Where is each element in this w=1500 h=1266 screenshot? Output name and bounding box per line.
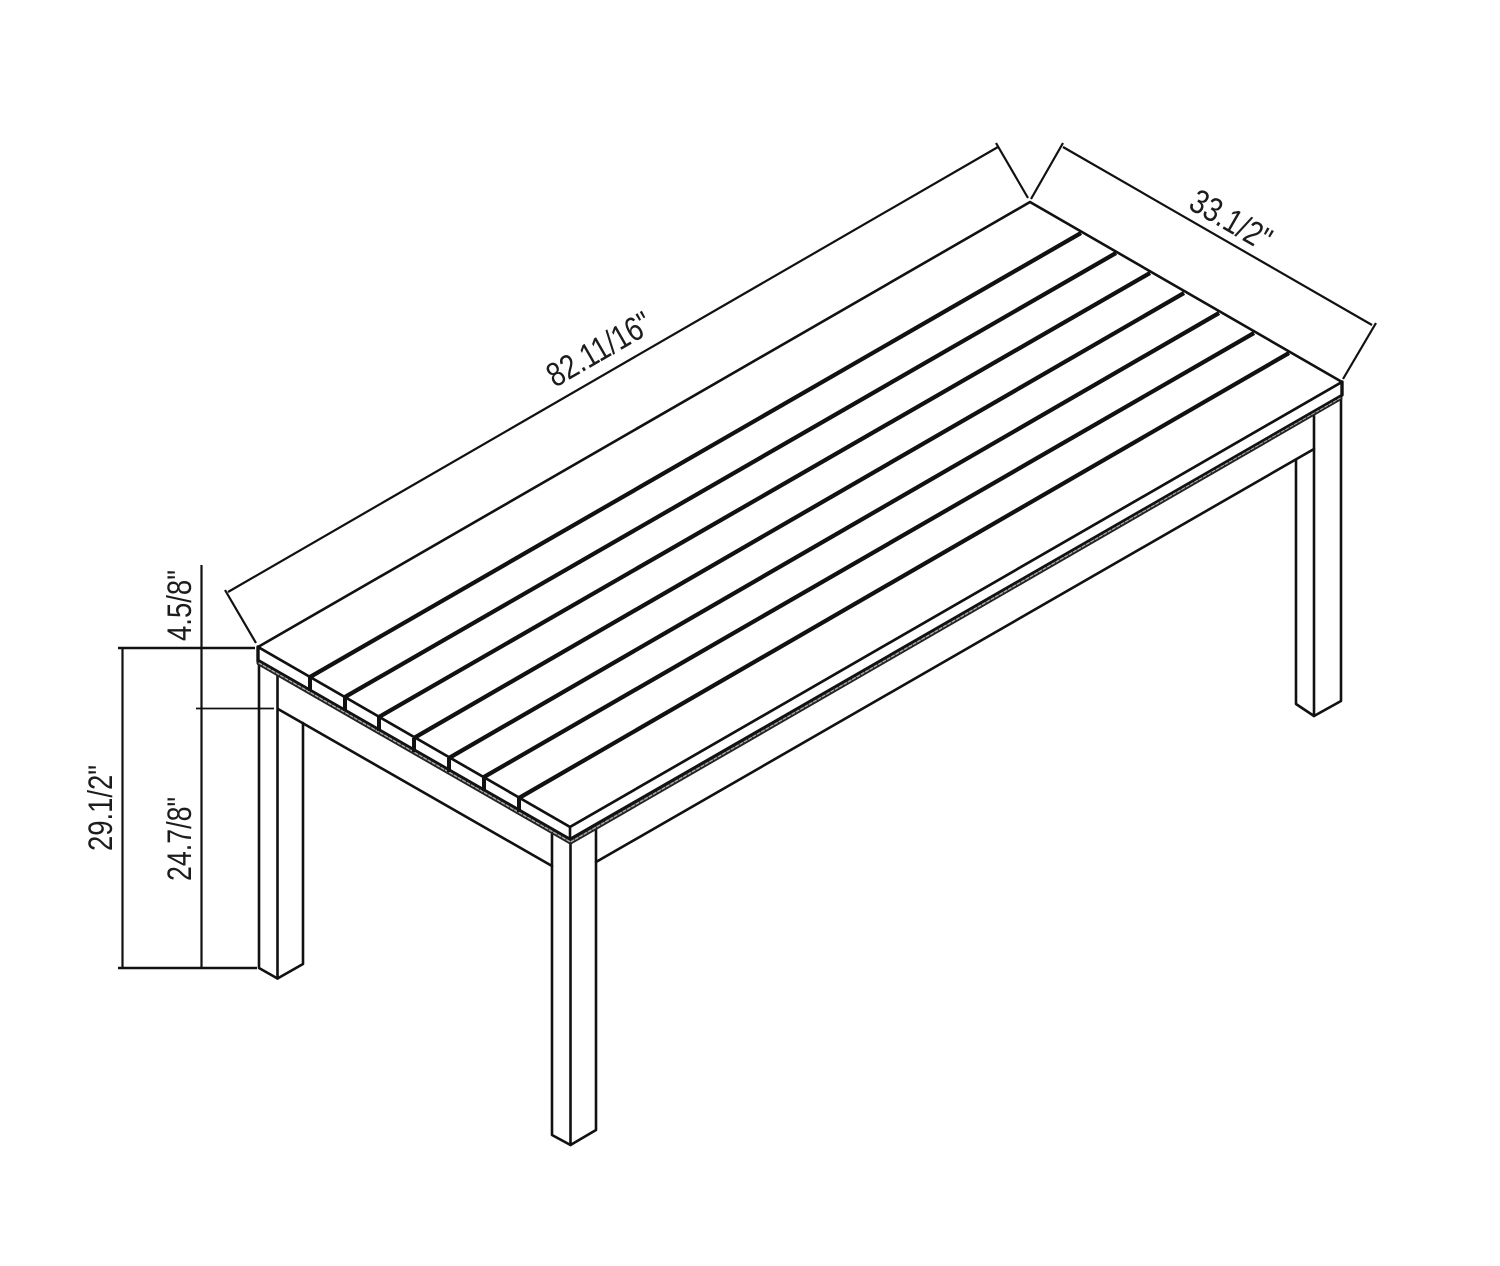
table top front edge bbox=[258, 382, 1342, 839]
label: top height: 4.5/8" bbox=[161, 570, 199, 641]
front leg bbox=[552, 826, 596, 1145]
width dimension line bbox=[1031, 143, 1376, 379]
right leg bbox=[1296, 398, 1341, 716]
apron lower edges bbox=[278, 449, 1314, 866]
left corner thick edge bbox=[256, 647, 260, 661]
dimension lines bbox=[118, 143, 1376, 968]
label: clearance height: 24.7/8" bbox=[161, 797, 199, 881]
slat end ticks bbox=[310, 677, 519, 812]
table drawing bbox=[258, 202, 1342, 1145]
label: total height: 29.1/2" bbox=[82, 765, 120, 851]
length dimension line bbox=[225, 143, 1028, 643]
front corner edge bbox=[569, 827, 571, 839]
table top surface bbox=[258, 202, 1342, 827]
label: width: 33.1/2" bbox=[1183, 182, 1278, 259]
apron and clearance dimension bbox=[196, 565, 274, 968]
right corner thick edge bbox=[1340, 382, 1344, 395]
label: length: 82.11/16" bbox=[540, 305, 659, 395]
slat gaps on top bbox=[310, 233, 1289, 798]
underside shadow band bbox=[259, 398, 1340, 842]
total height dimension bbox=[118, 648, 257, 968]
back-left leg bbox=[259, 664, 303, 978]
